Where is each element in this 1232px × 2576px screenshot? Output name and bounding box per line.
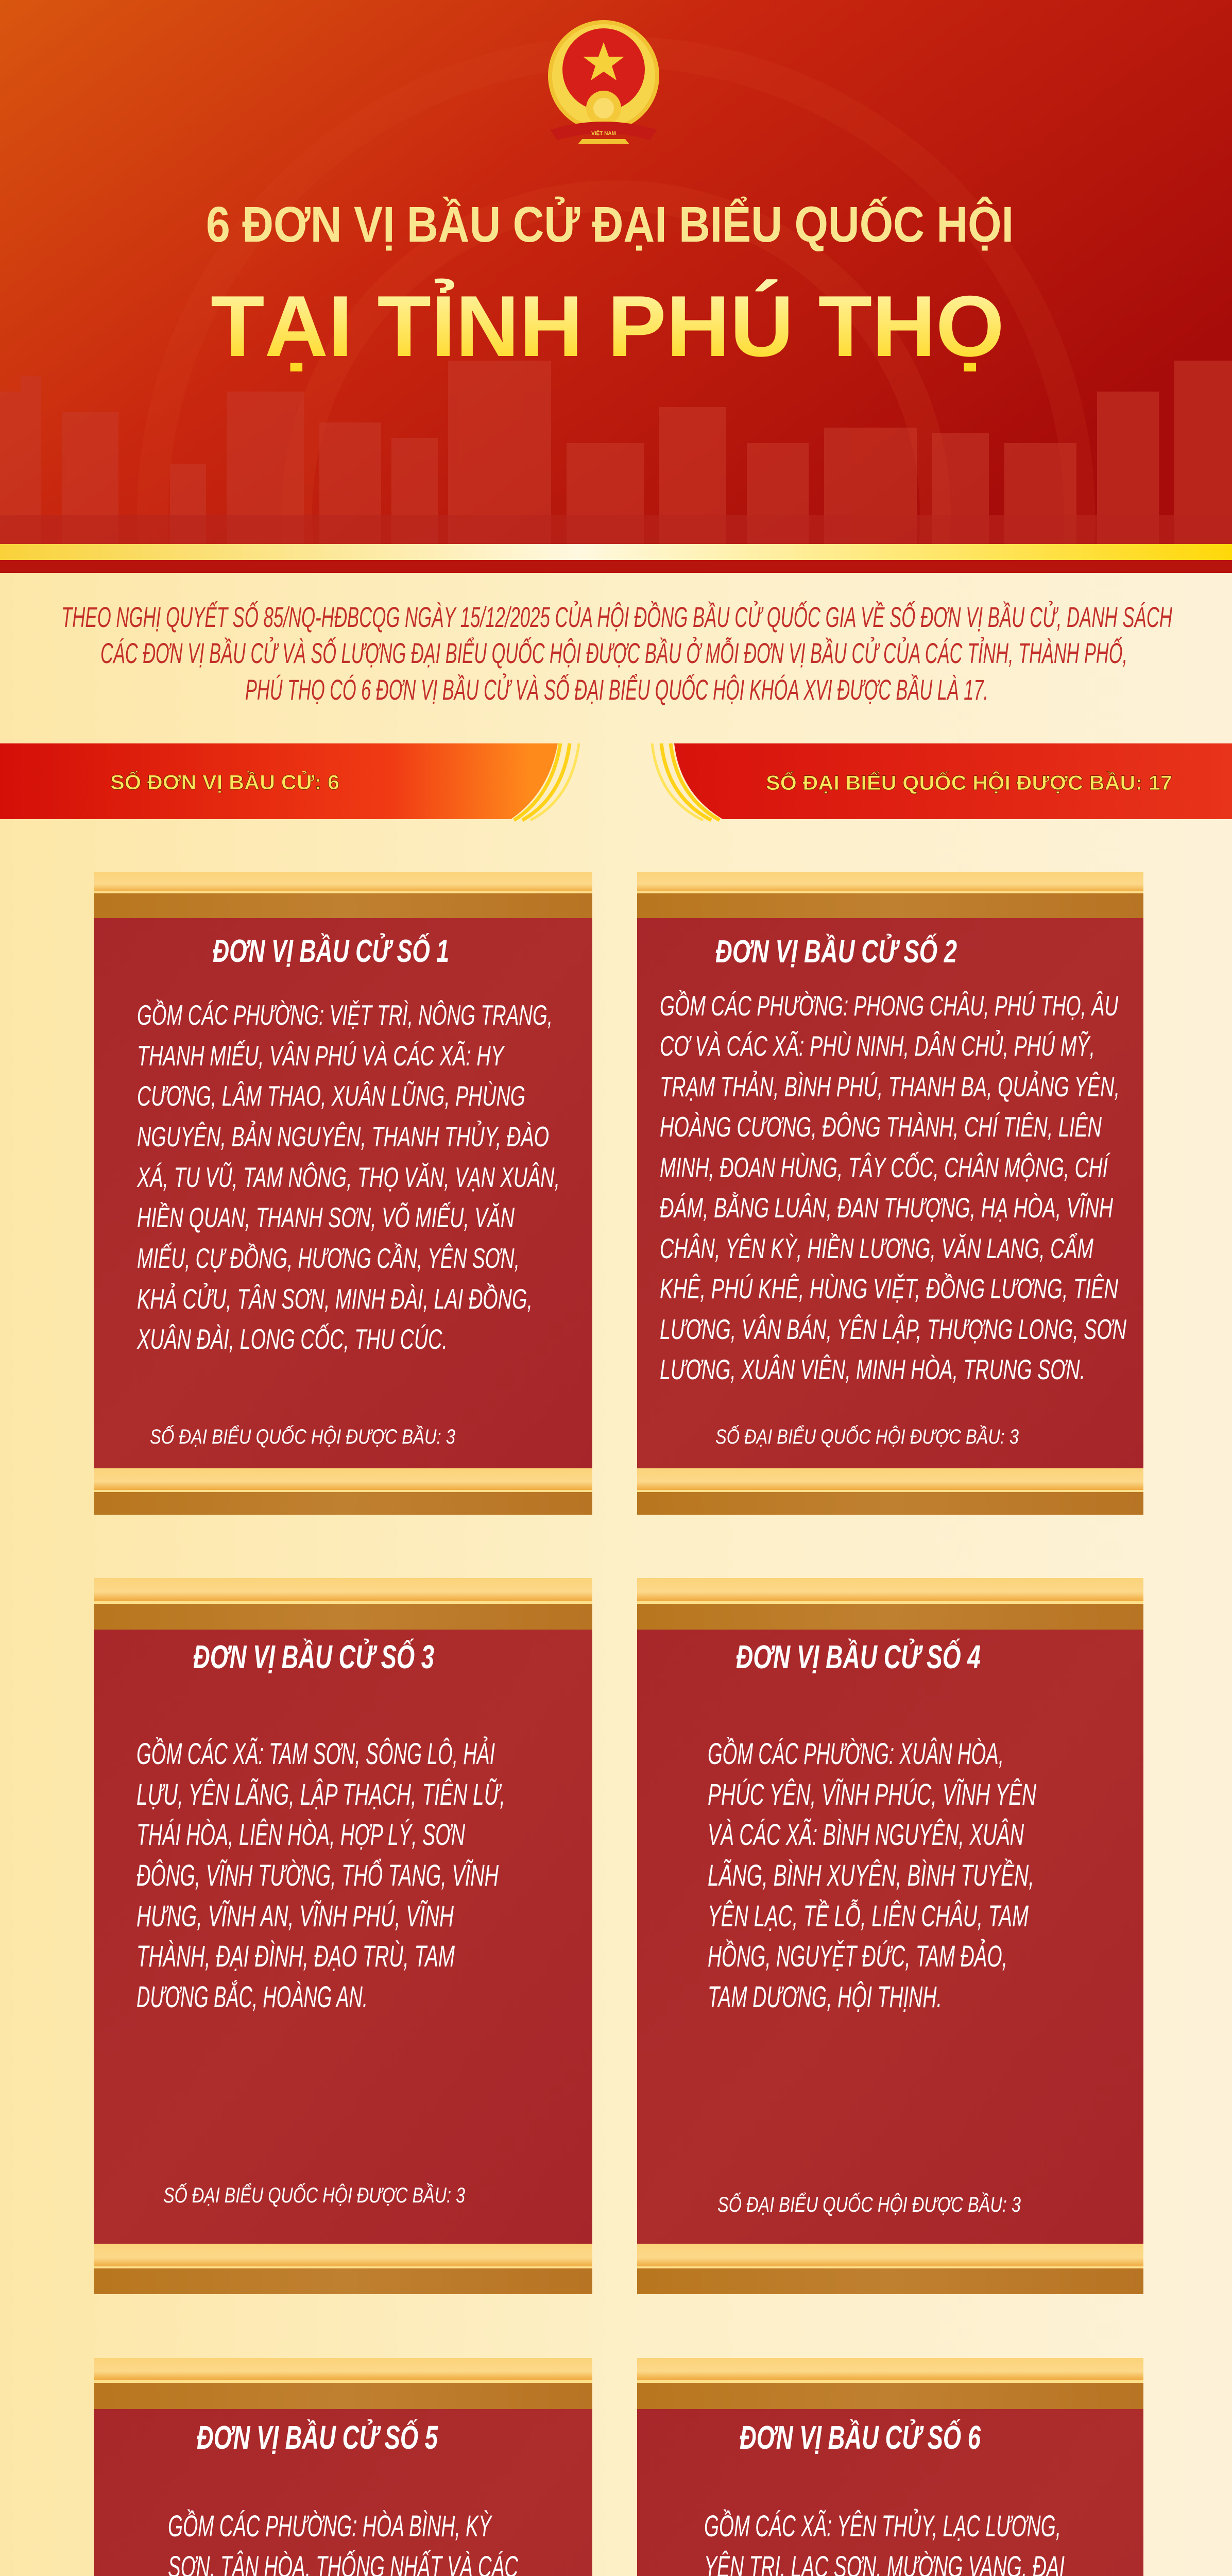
text block: card 1: MIẾU, CỰ ĐỒNG, HƯƠNG CẦN, YÊN SƠN,	[137, 1242, 520, 1274]
text block: card 4: TAM DƯƠNG, HỘI THỊNH.	[708, 1980, 942, 2014]
heading: card 2: ĐƠN VỊ BẦU CỬ SỐ 2	[715, 934, 957, 970]
heading: card 1: ĐƠN VỊ BẦU CỬ SỐ 1	[213, 934, 449, 969]
text block: card 1: CƯƠNG, LÂM THAO, XUÂN LŨNG, PHÙNG	[137, 1080, 525, 1112]
text block: card 4: YÊN LẠC, TỀ LỖ, LIÊN CHÂU, TAM	[708, 1900, 1029, 1933]
text block: card 1: XUÂN ĐÀI, LONG CỐC, THU CÚC.	[136, 1323, 448, 1355]
text block: card 3: ĐÔNG, VĨNH TƯỜNG, THỔ TANG, VĨNH	[136, 1859, 499, 1892]
icon: national emblem	[548, 20, 659, 144]
heading: card 6: ĐƠN VỊ BẦU CỬ SỐ 6	[740, 2418, 981, 2456]
text block: card 3: DƯƠNG BẮC, HOÀNG AN.	[136, 1980, 368, 2014]
text block: card 4: GỒM CÁC PHƯỜNG: XUÂN HÒA,	[708, 1737, 1004, 1771]
title: 6 ĐƠN VỊ BẦU CỬ ĐẠI BIỂU QUỐC HỘI	[206, 196, 1014, 252]
text block: card 4: PHÚC YÊN, VĨNH PHÚC, VĨNH YÊN	[708, 1778, 1036, 1811]
text block: card 3: THÀNH, ĐẠI ĐÌNH, ĐẠO TRÙ, TAM	[136, 1940, 455, 1973]
icon: national emblem: VIỆT NAM	[591, 130, 616, 137]
text block: card 3: GỒM CÁC XÃ: TAM SƠN, SÔNG LÔ, HẢI	[136, 1737, 495, 1771]
text block: card 3: HƯNG, VĨNH AN, VĨNH PHÚ, VĨNH	[136, 1900, 454, 1933]
text block: card 3: THÁI HÒA, LIÊN HÒA, HỢP LÝ, SƠN	[136, 1818, 465, 1852]
text block: card 5: GỒM CÁC PHƯỜNG: HÒA BÌNH, KỲ	[168, 2510, 493, 2543]
text block: card 6	[704, 2509, 1089, 2576]
footer: card 4 seats: SỐ ĐẠI BIỂU QUỐC HỘI ĐƯỢC BẦU: 3	[717, 2192, 1021, 2216]
text block: card 1	[136, 999, 560, 1355]
text block: card 1: NGUYÊN, BẢN NGUYÊN, THANH THỦY, ĐÀO	[137, 1120, 549, 1153]
title	[206, 196, 1014, 375]
text block: card 3: LỰU, YÊN LÃNG, LẬP THẠCH, TIÊN LỮ,	[136, 1778, 505, 1811]
text block: card 1: XÁ, TU VŨ, TAM NÔNG, THỌ VĂN, VẠN XUÂN,	[136, 1161, 560, 1193]
footer: card 3 seats: SỐ ĐẠI BIỂU QUỐC HỘI ĐƯỢC BẦU: 3	[163, 2182, 465, 2207]
text block: card 1: KHẢ CỬU, TÂN SƠN, MINH ĐÀI, LAI ĐỒNG,	[137, 1282, 533, 1315]
text block: card 4: HỒNG, NGUYỆT ĐỨC, TAM ĐẢO,	[708, 1939, 1007, 1973]
text block: card 2	[660, 990, 1126, 1385]
header background	[0, 0, 1232, 544]
banner: right: SỐ ĐẠI BIỂU QUỐC HỘI ĐƯỢC BẦU: 17	[766, 770, 1172, 794]
text block: card 4: VÀ CÁC XÃ: BÌNH NGUYÊN, XUÂN	[708, 1818, 1024, 1852]
text block: card 3	[136, 1737, 505, 2014]
background: cream	[0, 573, 1232, 2576]
text block: card 4	[708, 1737, 1036, 2014]
text block: card 1: HIỀN QUAN, THANH SƠN, VÕ MIẾU, VĂN	[137, 1201, 515, 1233]
heading: card 4: ĐƠN VỊ BẦU CỬ SỐ 4	[736, 1638, 981, 1675]
heading: card 3: ĐƠN VỊ BẦU CỬ SỐ 3	[193, 1638, 434, 1675]
panel: card 1	[94, 872, 592, 1515]
title: TẠI TỈNH PHÚ THỌ	[211, 278, 1004, 375]
heading: card 5: ĐƠN VỊ BẦU CỬ SỐ 5	[197, 2418, 438, 2456]
text block: card 4: LÃNG, BÌNH XUYÊN, BÌNH TUYỀN,	[708, 1859, 1034, 1892]
footer: card 2 seats: SỐ ĐẠI BIỂU QUỐC HỘI ĐƯỢC BẦU: 3	[715, 1424, 1019, 1448]
panel: card 3	[94, 1578, 592, 2294]
banner: left	[0, 743, 579, 820]
text block: card 5	[167, 2510, 522, 2576]
panel: card 2	[637, 872, 1143, 1515]
panel: card 5	[94, 2358, 592, 2576]
text block: card 1: GỒM CÁC PHƯỜNG: VIỆT TRÌ, NÔNG TRANG,	[137, 999, 553, 1031]
banner: right	[652, 743, 1232, 820]
banner: left: SỐ ĐƠN VỊ BẦU CỬ: 6	[110, 770, 339, 794]
header stripes	[0, 544, 1232, 560]
panel: card 4	[637, 1578, 1143, 2294]
panel: card 6	[637, 2358, 1143, 2576]
intro text	[61, 601, 1172, 706]
text block: card 1: THANH MIẾU, VÂN PHÚ VÀ CÁC XÃ: HY	[137, 1040, 505, 1072]
footer: card 1 seats: SỐ ĐẠI BIỂU QUỐC HỘI ĐƯỢC BẦU: 3	[150, 1424, 455, 1448]
